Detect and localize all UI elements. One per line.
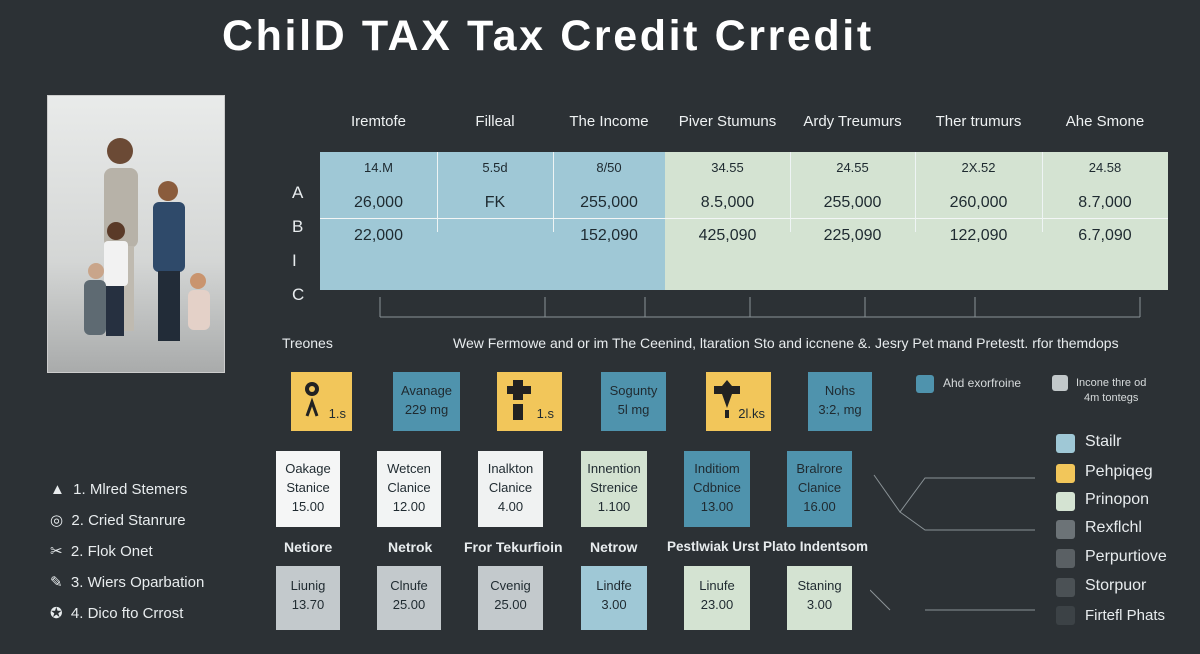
right legend: Perpurtiove <box>1085 548 1167 565</box>
text: 25.00 <box>494 597 527 612</box>
row 2 labels: Fror Tekurfioin <box>464 539 563 555</box>
text: The Income <box>569 113 649 130</box>
text: 122,090 <box>950 227 1007 244</box>
right legend: Firtefl Phats <box>1085 607 1165 624</box>
text: 26,000 <box>354 194 403 211</box>
icon cards row <box>291 372 872 431</box>
text: 25.00 <box>393 597 425 612</box>
right legend: Pehpiqeg <box>1085 463 1153 480</box>
cards row 3 <box>276 566 852 630</box>
row labels: A <box>292 183 303 202</box>
text: Ahd exorfroine <box>943 376 1021 390</box>
text: Innention <box>587 461 641 476</box>
left numbered list: ▲ 1. Mlred Stemers <box>50 481 187 498</box>
table headers <box>351 113 1144 130</box>
photo: family <box>47 95 225 373</box>
text: 255,000 <box>824 194 881 211</box>
right legend: Stailr <box>1085 433 1121 450</box>
text: 13.70 <box>292 597 324 612</box>
text: Lindfe <box>596 578 632 593</box>
row labels: I <box>292 251 297 270</box>
text: Staning <box>797 578 842 593</box>
text: 425,090 <box>699 227 756 244</box>
text: 3.00 <box>601 597 627 612</box>
left numbered list: ✪ 4. Dico fto Crrost <box>50 605 183 622</box>
text: 225,090 <box>824 227 881 244</box>
right legend <box>1056 433 1167 625</box>
text: Inalkton <box>488 461 533 476</box>
left numbered list <box>50 481 204 622</box>
text: Clnufe <box>390 578 428 593</box>
left numbered list: ✎ 3. Wiers Oparbation <box>50 574 204 591</box>
connector lines <box>870 474 1035 610</box>
text: 12.00 <box>393 499 425 514</box>
cards row 2 <box>276 451 852 527</box>
text: 1.100 <box>598 499 630 514</box>
row labels: C <box>292 285 304 304</box>
text: 22,000 <box>354 227 403 244</box>
row labels <box>292 183 304 304</box>
text: 24.55 <box>836 160 869 175</box>
text: 152,090 <box>580 227 638 244</box>
text: Wetcen <box>387 461 431 476</box>
right legend: Prinopon <box>1085 491 1149 508</box>
text: Clanice <box>489 480 532 495</box>
text: Liunig <box>291 578 325 593</box>
row 2 labels: Pestlwiak Urst Plato Indentsom <box>667 539 868 554</box>
text: 2X.52 <box>962 160 995 175</box>
data table <box>320 152 1168 290</box>
text: Bralrore <box>796 461 843 476</box>
right legend: Storpuor <box>1085 577 1146 594</box>
text: 14.M <box>364 160 393 175</box>
right legend: Rexflchl <box>1085 519 1142 536</box>
text: Ahe Smone <box>1066 113 1144 130</box>
row labels: B <box>292 217 303 236</box>
text: Clanice <box>387 480 431 495</box>
left numbered list: ✂ 2. Flok Onet <box>50 543 153 560</box>
text: 2l.ks <box>738 406 765 421</box>
text: 255,000 <box>580 194 638 211</box>
text: 8.5,000 <box>701 194 754 211</box>
text: 15.00 <box>292 499 324 514</box>
text: Oakage <box>285 461 331 476</box>
text: 1.s <box>537 406 554 421</box>
text: Linufe <box>699 578 735 593</box>
text: 24.58 <box>1089 160 1121 175</box>
text: 5l mg <box>618 402 649 417</box>
text: 3:2, mg <box>818 402 862 417</box>
text: 3.00 <box>807 597 832 612</box>
row 2 labels: Netrok <box>388 539 432 555</box>
text: Inditiom <box>694 461 740 476</box>
text: 34.55 <box>711 160 744 175</box>
row 2 labels <box>284 539 868 555</box>
subtitle: Wew Fermowe and or im The Ceenind, ltaration Sto and iccnene &. Jesry Pet mand Pretestt. rfor themdops <box>453 335 1119 351</box>
text: Nohs <box>825 383 855 398</box>
row 2 labels: Netrow <box>590 539 637 555</box>
text: 5.5d <box>482 160 508 175</box>
text: Sogunty <box>610 383 657 398</box>
title: ChilD TAX Tax Credit Crredit <box>222 12 874 60</box>
text: 23.00 <box>701 597 733 612</box>
text: FK <box>485 194 505 211</box>
text: 1.s <box>329 406 346 421</box>
bracket lines <box>380 297 1140 318</box>
text: 16.00 <box>803 499 836 514</box>
text: 6.7,090 <box>1078 227 1132 244</box>
text: Iremtofe <box>351 113 406 130</box>
text: Filleal <box>475 113 515 130</box>
left numbered list: ◎ 2. Cried Stanrure <box>50 512 186 529</box>
text: Piver Stumuns <box>679 113 776 130</box>
text: 8.7,000 <box>1078 194 1132 211</box>
text: 8/50 <box>596 160 622 175</box>
section heading: Treones <box>282 335 333 351</box>
text: 4.00 <box>498 499 523 514</box>
text: 260,000 <box>950 194 1007 211</box>
table values <box>354 160 1132 244</box>
text: Cdbnice <box>693 480 741 495</box>
text: Ardy Treumurs <box>803 113 902 130</box>
text: Cvenig <box>490 578 531 593</box>
text: 229 mg <box>405 402 448 417</box>
text: 4m tontegs <box>1084 392 1138 404</box>
text: Incone thre od <box>1076 377 1146 389</box>
text: Stanice <box>286 480 330 495</box>
legend top <box>916 375 1146 404</box>
text: Ther trumurs <box>936 113 1021 130</box>
text: Clanice <box>798 480 841 495</box>
text: Strenice <box>590 480 638 495</box>
text: Avanage <box>401 383 452 398</box>
row 2 labels: Netiore <box>284 539 332 555</box>
text: 13.00 <box>701 499 733 514</box>
